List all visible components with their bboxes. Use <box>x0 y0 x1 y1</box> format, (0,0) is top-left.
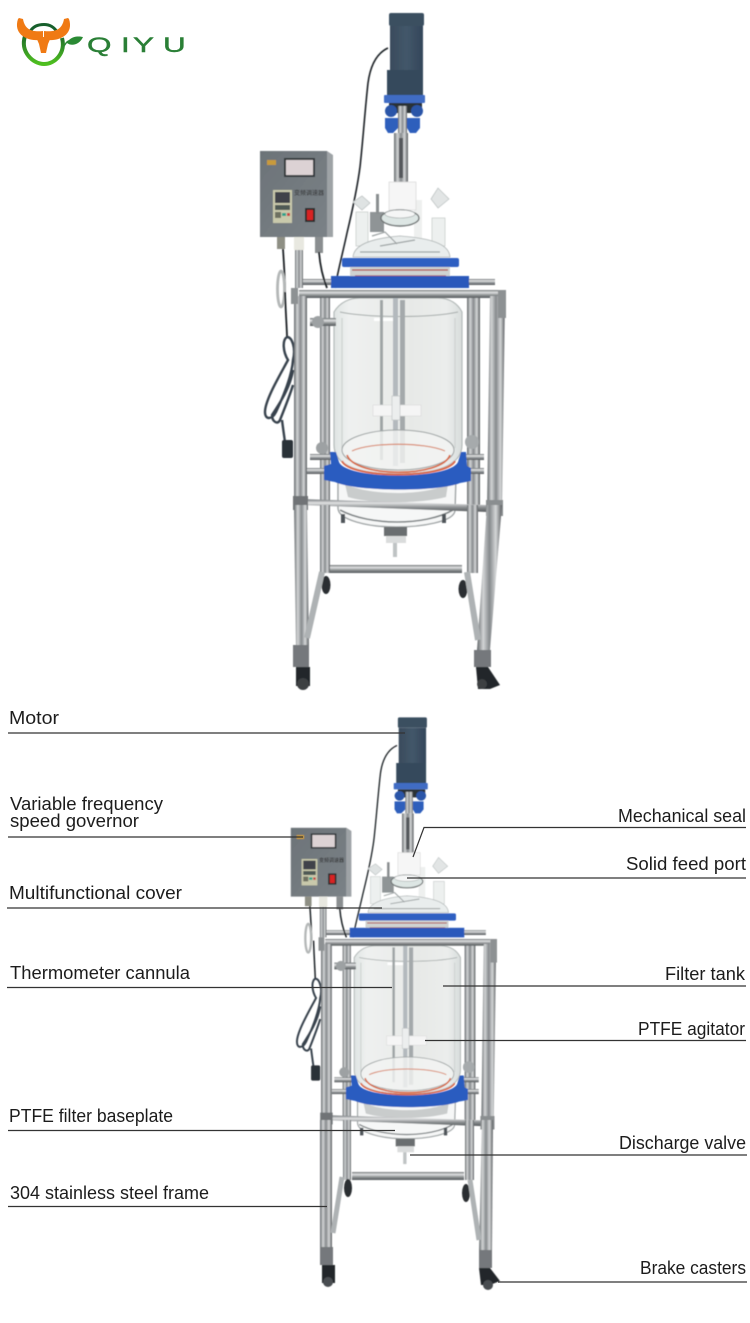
left front leg and caster <box>293 505 310 690</box>
wordmark: QIYU <box>87 33 186 57</box>
left front leg and caster <box>320 1120 335 1287</box>
label: 304 stainless steel frame: 304 stainless steel frame <box>10 1183 209 1203</box>
label: Filter tank: Filter tank <box>665 964 746 984</box>
label: Solid feed port: Solid feed port <box>626 854 746 874</box>
label: Multifunctional cover: Multifunctional cover <box>9 883 182 903</box>
icon: horns <box>17 18 70 40</box>
reactor frame and vessel <box>297 937 497 1164</box>
icon: ring <box>24 36 63 64</box>
reactor upper section <box>291 717 486 953</box>
photo: annotated reactor <box>291 717 500 1290</box>
reactor upper section <box>260 13 495 307</box>
control box text: 变频调速器 <box>319 857 344 864</box>
label: Discharge valve: Discharge valve <box>619 1133 746 1153</box>
control box text: 变频调速器 <box>294 189 324 197</box>
label: Variable frequency speed governor: Variable frequency <box>10 794 163 814</box>
logo: QIYU bull head <box>17 18 186 64</box>
icon: leaf <box>62 36 83 50</box>
label: Variable frequency speed governor <box>8 794 303 837</box>
label: Variable frequency speed governor: speed governor <box>10 811 139 831</box>
label: PTFE agitator: PTFE agitator <box>638 1019 745 1039</box>
reactor frame and vessel <box>265 288 506 557</box>
label: Brake casters: Brake casters <box>640 1258 746 1278</box>
label: Mechanical seal: Mechanical seal <box>618 806 746 826</box>
rear legs, bar and braces <box>307 505 478 640</box>
right front leg and caster <box>474 505 502 689</box>
icon: dark arc <box>29 24 58 33</box>
label: Thermometer cannula: Thermometer cannula <box>10 963 191 983</box>
label: PTFE filter baseplate: PTFE filter baseplate <box>9 1106 173 1126</box>
icon: head <box>36 37 51 53</box>
photo: top reactor <box>260 13 506 690</box>
label: Mechanical seal <box>413 806 746 857</box>
label: Motor: Motor <box>9 708 59 728</box>
right front leg and caster <box>479 1120 500 1290</box>
rear legs, bar and braces <box>333 1120 479 1240</box>
